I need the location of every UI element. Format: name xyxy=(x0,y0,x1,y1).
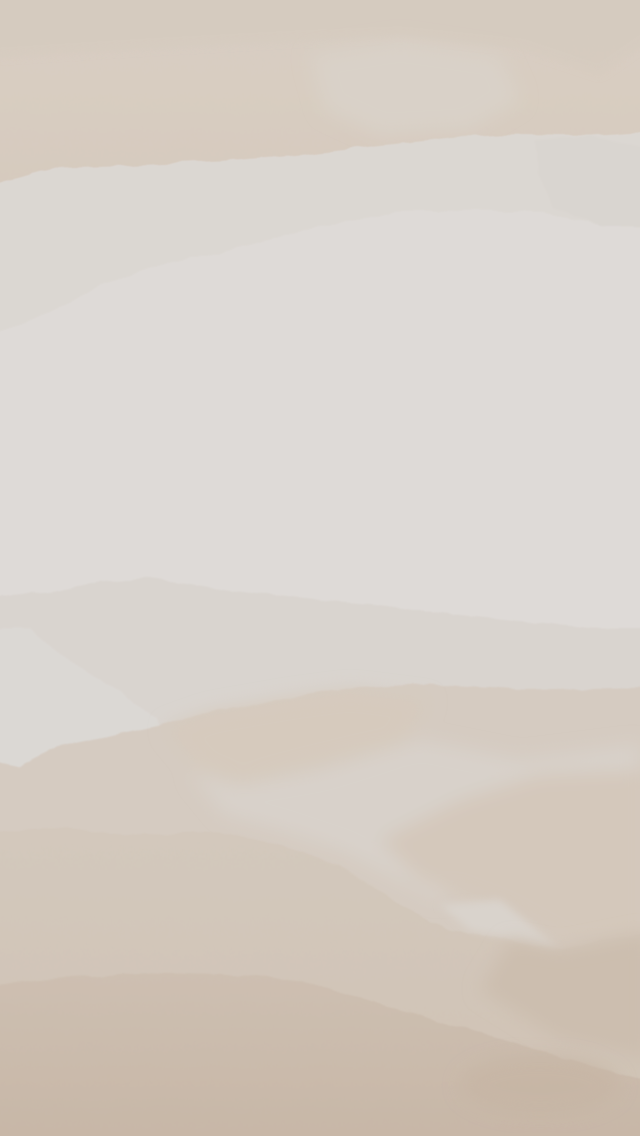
lower wash patches xyxy=(440,900,640,1060)
top beige wash xyxy=(0,0,640,187)
lower grey wash xyxy=(0,578,640,800)
upper pale grey wash xyxy=(0,132,640,338)
bottom tan wash xyxy=(0,973,640,1136)
middle tan wash xyxy=(0,684,640,950)
top wash soft patches xyxy=(0,0,640,135)
lower beige wash xyxy=(0,828,640,1136)
middle wash patches xyxy=(165,690,640,950)
bottom dark patch xyxy=(460,1055,620,1115)
